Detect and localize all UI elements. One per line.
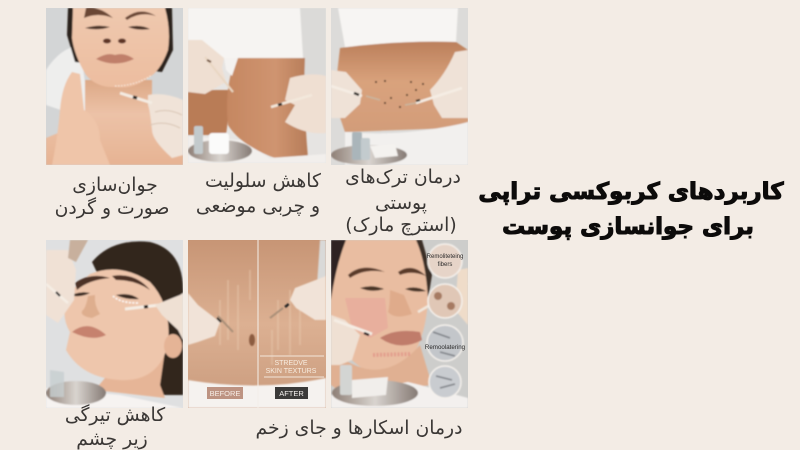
label: before: BEFORE <box>210 389 240 398</box>
caption: cellulite line two: و چربی موضعی <box>196 196 320 217</box>
caption: under-eye darkness: کاهش تیرگی <box>65 404 165 426</box>
label: remodeling fibers: fibers <box>438 262 452 268</box>
photo: cellulite and local fat reduction <box>188 8 326 163</box>
caption: scars and wounds: درمان اسکارها و جای زخم <box>256 418 462 439</box>
caption: face and neck rejuvenation: جوان‌سازی <box>72 175 158 196</box>
label: skin texture <box>266 360 316 373</box>
caption: stretch mark line three: (استرچ مارک) <box>345 215 457 236</box>
title line two: برای جوانسازی پوست <box>502 214 754 240</box>
photo: stretch mark treatment <box>331 8 468 165</box>
label: skin texture: SKIN TEXTURS <box>266 368 317 375</box>
label: remodeling fibers: Remoliteteing <box>427 254 463 260</box>
caption: under-eye line two: زیر چشم <box>76 429 148 450</box>
caption: cellulite reduction: کاهش سلولیت <box>205 171 321 192</box>
label: after: AFTER <box>279 389 304 398</box>
label: remodeling fibers <box>427 254 463 266</box>
photo: before and after stretch skin texture <box>188 240 326 408</box>
label: before <box>207 387 243 399</box>
photo: acne scar and wound scar treatment <box>331 240 468 408</box>
caption: face and neck line two: صورت و گردن <box>55 197 169 219</box>
label: remodeling: Remoolatering <box>425 344 466 351</box>
title line one: کاربردهای کربوکسی تراپی <box>478 179 784 205</box>
label: skin texture: STREDVE <box>274 360 308 367</box>
label: after <box>275 387 308 399</box>
caption: stretch mark treatment: درمان ترک‌های <box>345 167 461 188</box>
photo: under-eye darkness reduction <box>46 240 183 408</box>
photo: face and neck rejuvenation <box>46 8 183 165</box>
caption: stretch mark line two: پوستی <box>375 193 427 214</box>
